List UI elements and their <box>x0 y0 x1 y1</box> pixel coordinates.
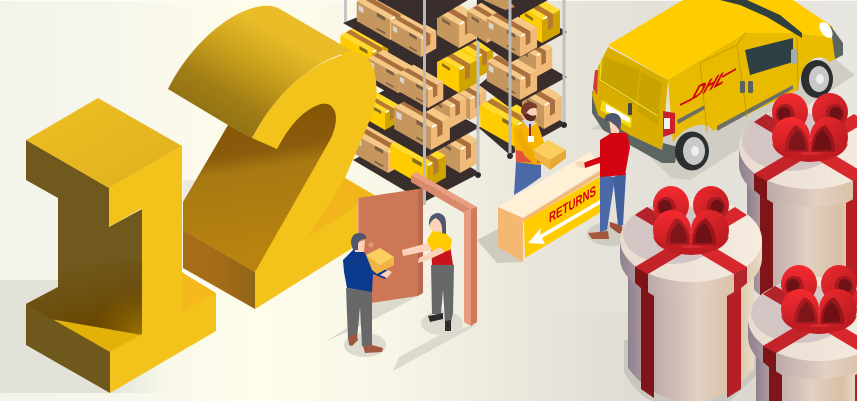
staff member holding box <box>513 102 566 195</box>
gift: back right <box>739 93 857 310</box>
DHL logo <box>680 67 736 106</box>
DHL van <box>592 0 843 170</box>
returns counter <box>477 152 610 263</box>
numeral 2 <box>168 6 378 309</box>
returns label: RETURNS <box>549 183 596 227</box>
front wheel <box>801 60 833 98</box>
warehouse shelving with boxes <box>340 0 567 205</box>
woman at door <box>402 213 463 335</box>
door <box>358 188 423 305</box>
gift: front centre <box>620 186 762 401</box>
left shelf rack <box>340 0 493 205</box>
returns arrow <box>528 200 600 244</box>
customer at returns counter <box>575 113 635 246</box>
right shelf rack <box>467 0 567 159</box>
DHL logo: DHL <box>689 67 730 105</box>
rear wheel <box>675 132 709 170</box>
numeral 1 <box>26 98 216 393</box>
van shadow <box>590 55 855 180</box>
gift shadow <box>624 340 760 401</box>
door shadows <box>325 296 477 371</box>
door frame <box>411 172 477 326</box>
gift: lower right <box>748 265 857 401</box>
man holding box at door <box>343 233 394 357</box>
